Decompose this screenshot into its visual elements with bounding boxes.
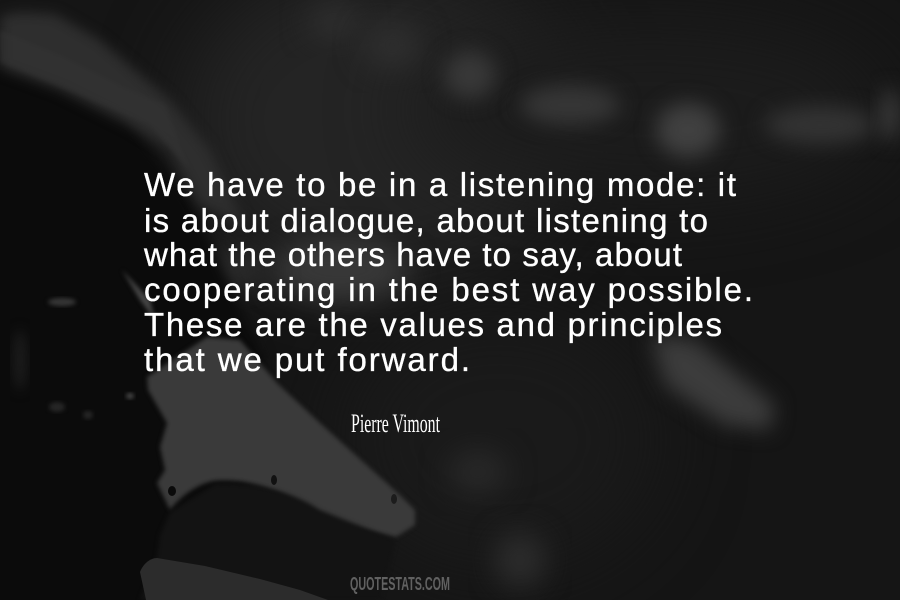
quote text: These are the values and principles	[144, 306, 722, 343]
quote text	[143, 166, 753, 378]
quote text: that we put forward.	[144, 341, 470, 378]
quote text: cooperating in the best way possible.	[144, 271, 753, 308]
quote text: is about dialogue, about listening to	[144, 202, 708, 239]
author name: Pierre Vimont	[351, 409, 440, 438]
quote text: We have to be in a listening mode: it	[144, 166, 736, 203]
quote text: what the others have to say, about	[143, 236, 682, 273]
watermark: QUOTESTATS.COM	[350, 574, 450, 594]
